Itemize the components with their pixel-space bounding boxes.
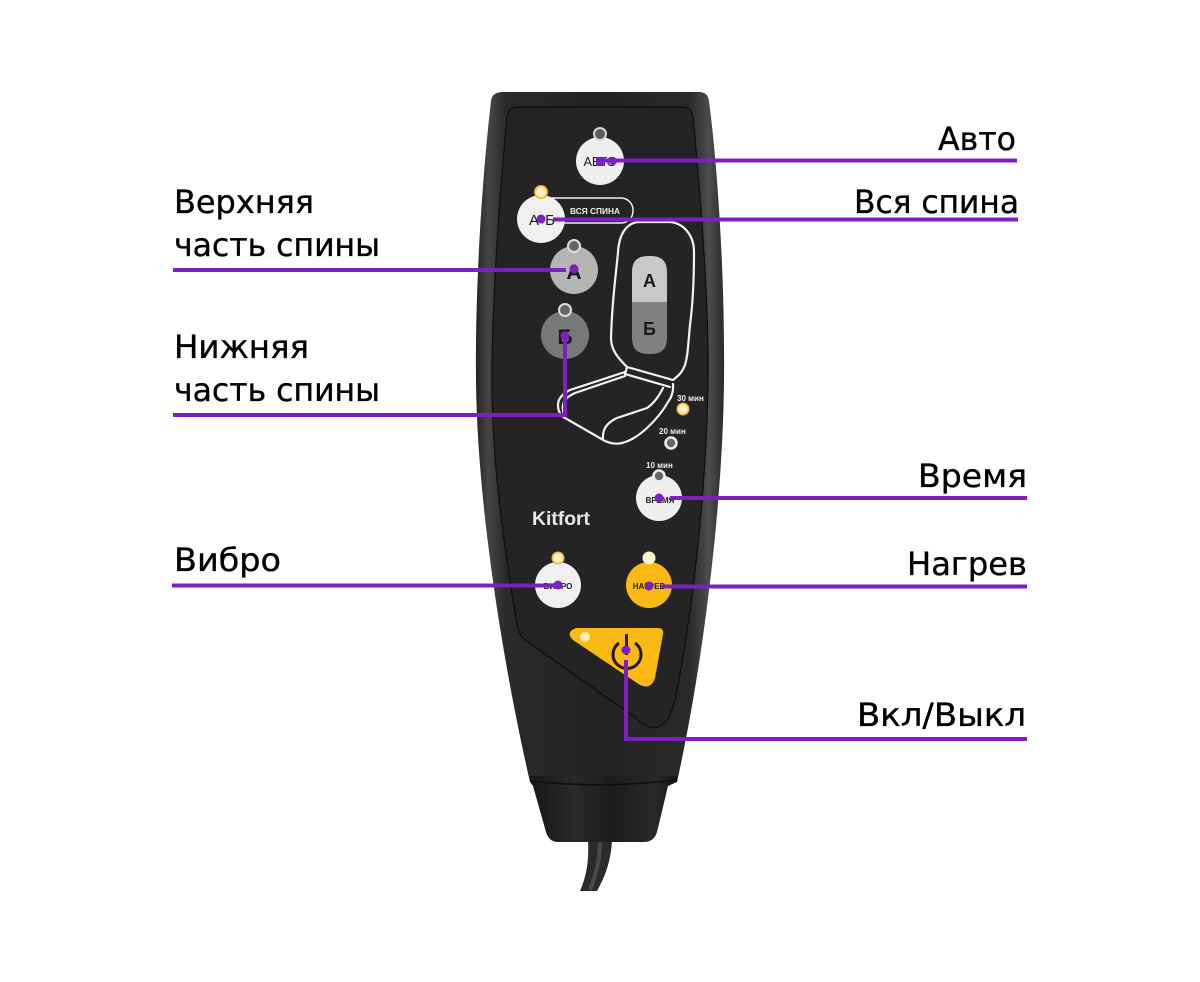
button: Вибро <box>535 552 581 608</box>
callout: Вся спина <box>536 214 1018 224</box>
button: Авто <box>576 128 624 185</box>
whole back pill label: ВСЯ СПИНА <box>570 207 620 216</box>
seat back outline <box>611 222 694 380</box>
button: Вибро: ВИБРО <box>544 582 572 591</box>
timer indicators <box>646 394 704 470</box>
seat cushion outline <box>558 372 673 444</box>
whole back pill label <box>535 198 633 223</box>
button: А+Б: А Б <box>529 212 555 229</box>
label: Вся спина: Вся спина <box>854 183 1019 221</box>
label: Время: Время <box>918 457 1027 495</box>
callout: Нагрев <box>644 582 1027 590</box>
label: Нижняя часть спины: Нижняя <box>174 328 309 366</box>
callout: Нижняя часть спины <box>173 332 570 415</box>
label: Нижняя часть спины: часть спины <box>174 371 380 409</box>
button: Б: Б <box>557 326 573 349</box>
callout: Вибро <box>172 580 562 590</box>
label: Нижняя часть спины <box>174 328 380 409</box>
timer indicators: 10 мин <box>646 461 673 470</box>
callout lines and markers <box>172 157 1027 739</box>
button: Время: ВРЕМЯ <box>646 496 675 505</box>
end cap <box>530 776 677 842</box>
label: Верхняя часть спины: Верхняя <box>174 183 314 221</box>
label: Вибро: Вибро <box>174 541 281 579</box>
logo: Kitfort: Kitfort <box>532 509 591 530</box>
timer indicators: 30 мин <box>677 394 704 403</box>
button: Нагрев: НАГРЕВ <box>633 582 665 591</box>
inner panel <box>492 107 708 728</box>
diagram zones A and Б: А <box>643 271 656 291</box>
label: Верхняя часть спины <box>174 183 380 264</box>
diagram zones A and Б: Б <box>643 319 656 339</box>
seat diagram <box>558 222 694 444</box>
label: Авто: Авто <box>938 120 1016 158</box>
button: Авто: АВТО <box>584 154 616 169</box>
cable <box>580 840 612 891</box>
button: Б <box>541 304 589 359</box>
button: А: А <box>566 261 582 284</box>
label: Верхняя часть спины: часть спины <box>174 226 380 264</box>
callout: Время <box>654 494 1027 502</box>
label: Нагрев: Нагрев <box>907 545 1027 583</box>
button: А+Б <box>517 185 565 243</box>
remote control body <box>476 92 724 842</box>
button: Время <box>636 470 682 521</box>
power button <box>570 628 663 686</box>
label: Вкл/Выкл: Вкл/Выкл <box>857 696 1026 734</box>
diagram zones A and Б <box>632 256 667 354</box>
button: Нагрев <box>626 552 672 608</box>
button: А <box>550 240 598 294</box>
callout: Вкл/Выкл <box>622 646 1027 739</box>
timer indicators: 20 мин <box>659 427 686 436</box>
callout: Верхняя часть спины <box>173 264 578 274</box>
callout: Авто <box>596 157 1017 166</box>
